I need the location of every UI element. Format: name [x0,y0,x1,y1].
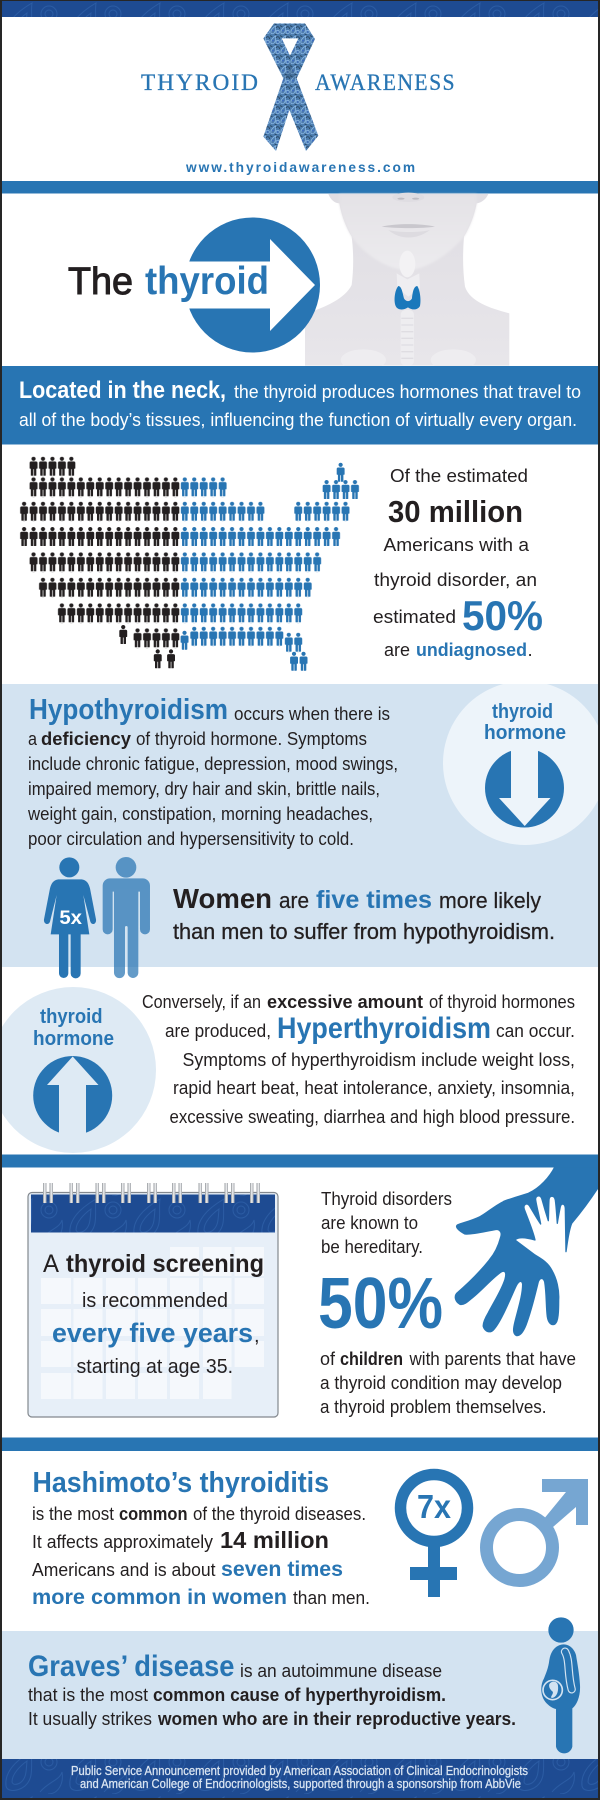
callout: women five times more likely: Women [173,883,272,914]
title: The thyroid [68,260,269,303]
hypothyroidism text: of thyroid hormone. Symptoms [136,729,367,749]
calendar text: thyroid screening: every five years [52,1318,253,1348]
hereditary text: of [320,1349,336,1369]
hypothyroidism text: impaired memory, dry hair and skin, brittle nails, [28,779,380,799]
hyperthyroidism text: can occur. [496,1021,575,1041]
callout: women five times more likely: are [279,888,309,913]
statistic text: 30 million, 50% undiagnosed: undiagnosed [416,639,527,660]
icon: thyroid hormone down [443,684,600,845]
panel: graves' disease: Graves’ disease [28,1650,234,1683]
footer band with sponsorship note: Public Service Announcement provided by American Association of Clinical Endocrinologists [71,1764,528,1778]
hyperthyroidism text: of thyroid hormones [429,992,575,1012]
logo wordmark: THYROID [141,70,260,95]
hypothyroidism text: include chronic fatigue, depression, mood swings, [28,754,398,774]
calendar text: thyroid screening: starting at age 35. [76,1356,233,1378]
icon: man [103,857,150,978]
hypothyroidism text: weight gain, constipation, morning headaches, [27,804,373,824]
hereditary text: 50% [318,1264,443,1344]
calendar text: thyroid screening: A [43,1250,59,1278]
hyperthyroidism text [142,992,575,1127]
panel: graves' disease: that is the most [28,1685,148,1705]
statistic text: 30 million, 50% undiagnosed: 50% [462,592,543,639]
hereditary text [318,1189,576,1417]
icon: woman with 5x: 5x [59,908,82,929]
icon: female symbol 7x [400,1474,468,1597]
statistic text: 30 million, 50% undiagnosed: Americans with a [384,534,530,555]
hashimoto's text: It affects approximately [32,1532,213,1552]
hyperthyroidism text: excessive sweating, diarrhea and high blood pressure. [170,1107,575,1127]
hereditary text: be hereditary. [321,1237,423,1257]
logo wordmark [141,70,456,95]
hypothyroidism text: occurs when there is [234,704,390,724]
hashimoto's text: of the thyroid diseases. [193,1504,366,1524]
panel: graves' disease: It usually strikes [28,1709,152,1729]
hashimoto's text: 14 million [220,1527,329,1553]
blue divider strip [0,1154,600,1168]
hypothyroidism text: Hypothyroidism [29,694,228,726]
hypothyroidism text: a [28,729,38,749]
hereditary text: children [340,1349,403,1369]
panel: graves' disease [0,1631,600,1759]
statistic text: 30 million, 50% undiagnosed: 30 million [388,494,523,529]
panel: graves' disease: is an autoimmune disease [240,1661,442,1681]
statistic text: 30 million, 50% undiagnosed: estimated [373,606,456,627]
hyperthyroidism text: are produced, [165,1021,271,1041]
panel: hypothyroidism background [0,684,600,967]
hereditary text: with parents that have [409,1349,576,1369]
footer band with sponsorship note: and American College of Endocrinologists, supported through a sponsorship from AbbVie [80,1777,521,1791]
blue divider strip [0,1438,600,1451]
hashimoto's text [32,1467,370,1609]
hashimoto's text: more common in women [32,1585,287,1609]
statistic text: 30 million, 50% undiagnosed [373,465,543,660]
statistic text: 30 million, 50% undiagnosed: thyroid disorder, an [374,569,537,590]
title: The thyroid: thyroid [145,260,269,303]
hashimoto's text: common [119,1504,188,1524]
hereditary text: a thyroid condition may develop [320,1373,562,1393]
icon: thyroid hormone down: hormone [484,722,566,744]
callout: women five times more likely: than men to suffer from hypothyroidism. [173,919,555,944]
hashimoto's text: seven times [221,1557,343,1581]
statistic text: 30 million, 50% undiagnosed: are [384,639,410,660]
panel: graves' disease: common cause of hyperthyroidism. [153,1685,446,1705]
hyperthyroidism text: Symptoms of hyperthyroidism include weight loss, [182,1050,575,1070]
illustration: head and neck with thyroid [305,193,509,371]
top paisley band [0,0,600,17]
calendar text: thyroid screening: , [254,1325,260,1347]
logo wordmark: AWARENESS [315,70,456,95]
title: The thyroid: The [68,261,133,303]
hyperthyroidism text: rapid heart beat, heat intolerance, anxiety, insomnia, [173,1078,575,1098]
callout: women five times more likely: more likely [439,888,541,913]
panel: located in the neck: all of the body’s tissues, influencing the function of virtually every organ. [19,410,577,430]
calendar text: thyroid screening [43,1250,264,1378]
icon: female symbol 7x: 7x [417,1488,452,1525]
hyperthyroidism text: Hyperthyroidism [277,1012,491,1045]
icon: thyroid hormone up: thyroid [40,1006,102,1028]
icon: calendar [28,1183,278,1417]
logo: awareness ribbon [263,23,318,151]
blue divider strip [0,181,600,194]
panel: located in the neck: the thyroid produces hormones that travel to [234,382,581,402]
thyroid gland [395,286,421,309]
chart: map of the USA made of people [19,457,360,671]
icon: parent and child hands [455,1167,598,1336]
hereditary text: Thyroid disorders [321,1189,452,1209]
icon: thyroid hormone up [0,987,156,1153]
hereditary text: are known to [321,1213,418,1233]
hyperthyroidism text: excessive amount [267,992,423,1012]
calendar text: thyroid screening: thyroid screening [66,1250,264,1278]
panel: graves' disease: women who are in their reproductive years. [157,1709,516,1729]
footer band with sponsorship note [0,1759,600,1800]
hashimoto's text: is the most [32,1504,114,1524]
hypothyroidism text: poor circulation and hypersensitivity to cold. [28,829,354,849]
panel: located in the neck [0,366,600,444]
hashimoto's text: Hashimoto’s thyroiditis [32,1467,329,1499]
hyperthyroidism text: Conversely, if an [142,992,261,1012]
website address: www.thyroidawareness.com [185,159,417,175]
hashimoto's text: Americans and is about [32,1560,216,1580]
hereditary text: a thyroid problem themselves. [320,1397,546,1417]
icon: woman with 5x [44,857,96,978]
statistic text: 30 million, 50% undiagnosed: . [528,639,533,660]
panel: located in the neck: Located in the neck, [19,377,226,404]
calendar text: thyroid screening: is recommended [82,1290,228,1312]
icon: male symbol [486,1479,588,1580]
callout: women five times more likely: five times [316,886,432,914]
icon: thyroid hormone down: thyroid [492,701,553,723]
callout: women five times more likely [173,883,555,944]
arrow circle [180,218,320,352]
hypothyroidism text: deficiency [41,729,131,749]
hypothyroidism text [27,694,398,849]
hashimoto's text: than men. [293,1588,370,1608]
statistic text: 30 million, 50% undiagnosed: Of the estimated [390,465,528,486]
icon: pregnant woman [541,1617,580,1753]
icon: thyroid hormone up: hormone [33,1028,114,1050]
